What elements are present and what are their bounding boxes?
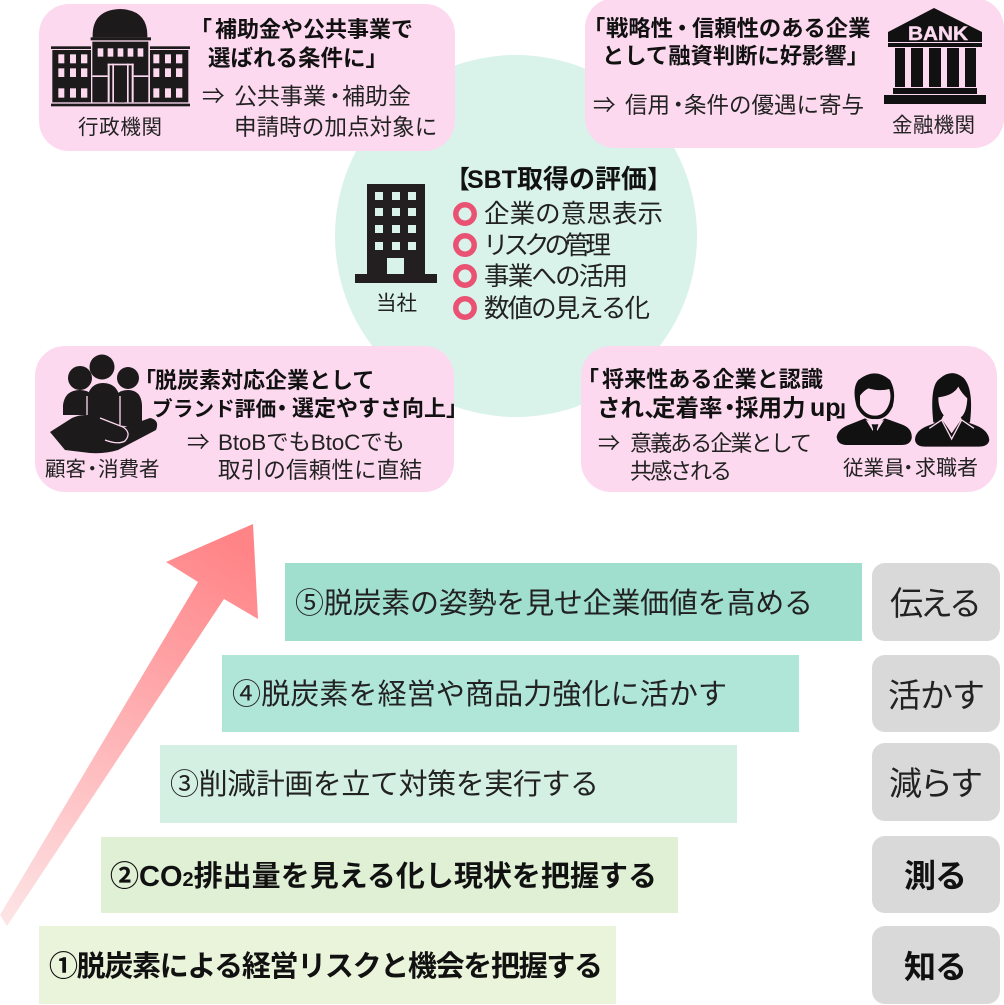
heading: quote: ブランド評価 [152, 397, 276, 421]
step 1 bar: ①脱炭素による経営リスクと機会を把握する [49, 950, 603, 983]
icon: office building [355, 184, 437, 283]
heading: quote: 脱炭素対応企業として [155, 368, 374, 393]
icon: bank [884, 8, 986, 104]
step 3 tag [872, 743, 1000, 821]
step 2 tag: 測る [904, 858, 967, 894]
heading: quote: 選ばれる条件に」 [208, 46, 388, 71]
text: benefit: ⇒ [593, 93, 616, 118]
text: benefit [593, 93, 864, 118]
icon: employee and job seeker [837, 373, 989, 447]
text: benefit [202, 83, 437, 140]
heading: quote: され、 [597, 395, 668, 421]
step 3 bar [160, 745, 737, 823]
heading: SBT evaluation: SBT [467, 166, 517, 194]
step 1 tag [872, 926, 1000, 1004]
text: benefit: 取引の信頼性に直結 [218, 458, 422, 483]
heading: quote: 将来性ある企業と認識 [602, 367, 823, 392]
heading: quote: 「 [190, 17, 212, 42]
label: customers: 顧客 [45, 458, 86, 481]
text: benefit: ・ [667, 93, 690, 118]
label: employees and job seekers: 求職者 [915, 457, 978, 480]
text: benefit: BtoBでもBtoCでも [218, 430, 405, 455]
heading: quote: 「 [134, 368, 156, 393]
list: evaluation items: 数値の見える化 [484, 295, 650, 323]
icon: hand holding people [50, 354, 157, 453]
panel: employees [577, 346, 997, 492]
step 1 bar [39, 926, 616, 1004]
step 4 bar [222, 655, 799, 732]
heading: quote: 選定やすさ向上」 [292, 396, 468, 421]
heading: quote: ・ [671, 16, 693, 41]
heading: quote: 戦略性 [606, 16, 673, 41]
step 1 tag: 知る [904, 949, 967, 985]
panel: company SBT evaluation [355, 164, 672, 323]
heading: quote: 「 [577, 367, 599, 392]
label: customers: ・ [82, 458, 102, 481]
text: benefit: 意義ある企業として [630, 431, 812, 456]
text: benefit: ・ [324, 83, 346, 109]
heading: quote: として融資判断に好影響」 [602, 44, 869, 68]
text: benefit: 共感される [630, 459, 732, 484]
step 2 tag [872, 836, 1000, 913]
heading: quote: 信頼性のある企業 [692, 16, 870, 41]
text: benefit [187, 430, 422, 483]
label: financial institution: 金融機関 [892, 114, 975, 137]
list: evaluation items [456, 200, 663, 323]
panel: customers [35, 346, 468, 492]
step 4 tag [872, 655, 1000, 732]
icon: government building [51, 9, 190, 106]
heading: SBT evaluation: 【 [445, 166, 470, 194]
text: benefit: 公共事業 [234, 83, 326, 109]
heading: quote: 「 [583, 16, 605, 41]
label: employees and job seekers: 従業員 [843, 457, 904, 480]
central circle background [335, 55, 697, 417]
heading: SBT evaluation: 】 [647, 166, 672, 194]
step 5 bar [285, 563, 862, 641]
list: evaluation items: 企業の意思表示 [484, 200, 663, 228]
step 4 tag: 活かす [888, 677, 985, 714]
text: benefit: ⇒ [187, 430, 210, 455]
text: benefit [598, 431, 812, 484]
heading: SBT evaluation: 取得の評価 [517, 164, 647, 194]
step 2 bar [101, 837, 678, 913]
heading: quote: 定着率 [652, 395, 722, 421]
label: customers: 消費者 [98, 458, 160, 481]
step 4 bar: ④脱炭素を経営や商品力強化に活かす [232, 678, 727, 711]
heading: quote: up [810, 394, 841, 422]
text: benefit: 申請時の加点対象に [234, 115, 437, 140]
text: benefit: ⇒ [202, 84, 225, 109]
heading: quote: 補助金や公共事業で [215, 17, 413, 42]
step 5 tag [872, 563, 1000, 641]
list: evaluation items: リスクの管理 [483, 232, 611, 260]
heading: quote: 」 [836, 395, 860, 421]
step 3 bar: ③削減計画を立て対策を実行する [170, 768, 599, 801]
text: benefit: 補助金 [342, 83, 411, 109]
step 5 bar: ⑤脱炭素の姿勢を見せ企業価値を高める [295, 587, 813, 620]
heading: quote: ・ [718, 395, 742, 421]
label: employees and job seekers: ・ [898, 457, 918, 480]
step 2 bar: ②CO2排出量を見える化し現状を把握する [110, 860, 657, 893]
step 5 tag: 伝える [890, 585, 982, 622]
list: evaluation items: 事業への活用 [484, 263, 628, 291]
text: benefit: 条件の優遇に寄与 [684, 93, 864, 118]
heading: quote: 採用力 [735, 395, 806, 421]
text: benefit: 信用 [625, 93, 670, 118]
label: government agency: 行政機関 [78, 116, 162, 139]
panel: financial institution [583, 0, 1004, 148]
heading: quote: ・ [271, 396, 293, 421]
icon: bank: BANK [908, 24, 968, 45]
text: benefit: ⇒ [598, 431, 620, 456]
step 3 tag: 減らす [889, 765, 983, 802]
label: company: 当社 [376, 292, 417, 315]
panel: government [39, 4, 455, 151]
arrow: upward progress [0, 524, 258, 926]
